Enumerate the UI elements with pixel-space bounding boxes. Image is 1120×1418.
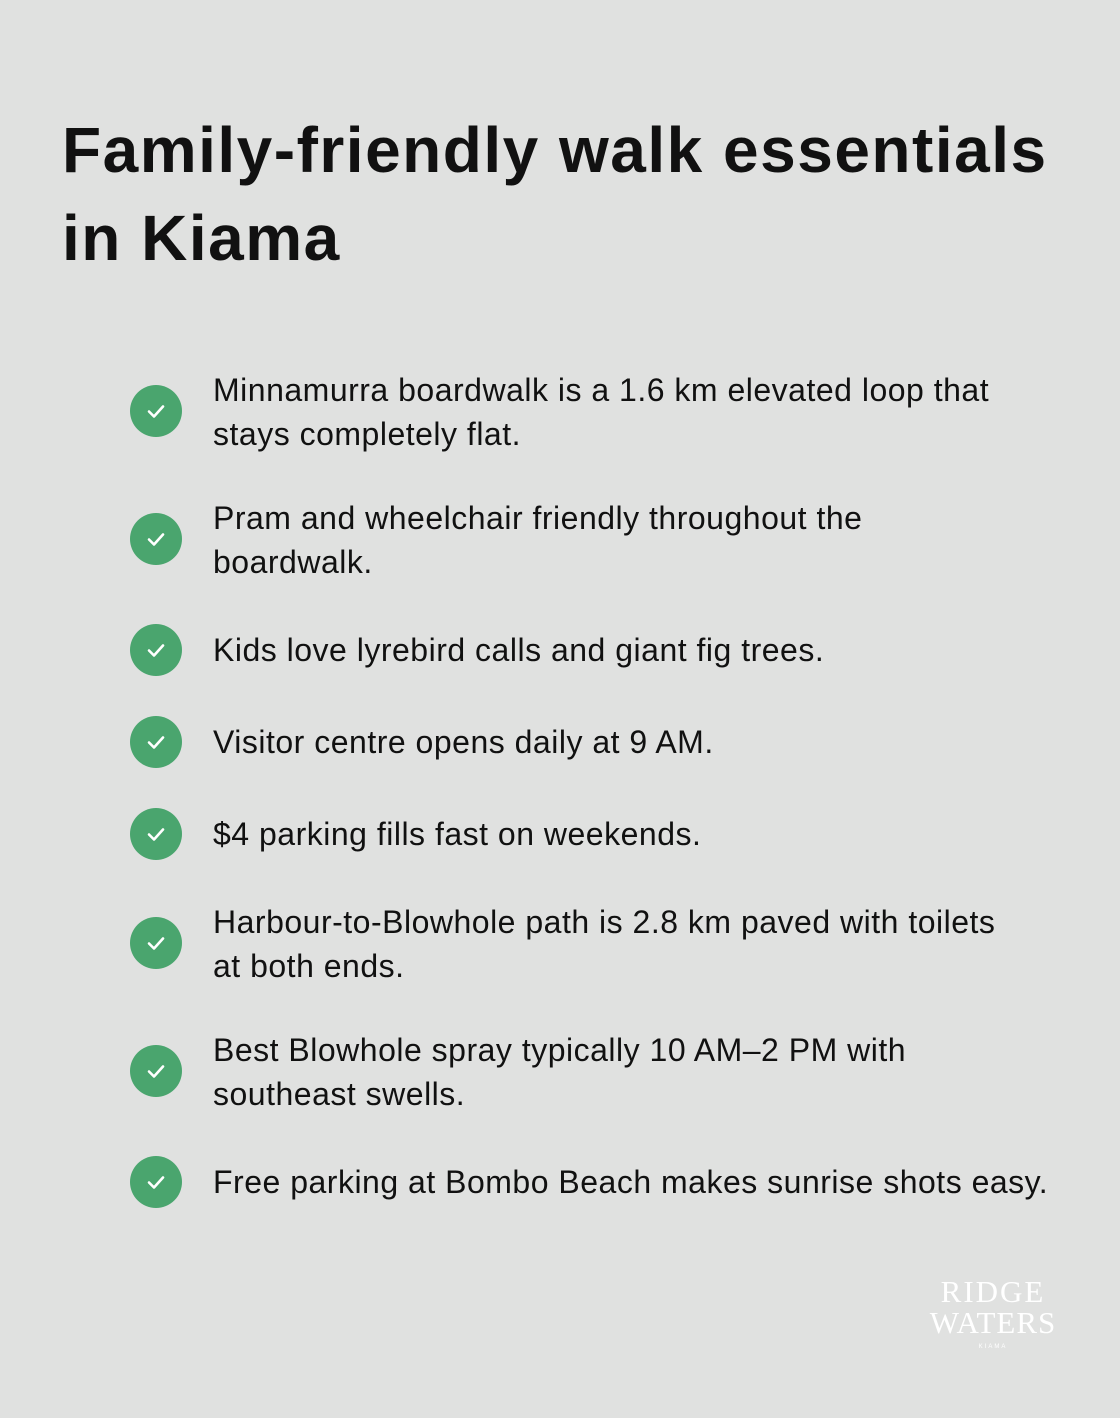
item 6 (130, 904, 995, 984)
text: stays completely flat. (213, 416, 521, 452)
text: Best Blowhole spray typically 10 AM–2 PM with (213, 1032, 906, 1068)
text: Pram and wheelchair friendly throughout the (213, 500, 862, 536)
logo: RIDGE (941, 1274, 1045, 1309)
text (213, 1032, 906, 1112)
item 3 (130, 624, 824, 676)
text: Harbour-to-Blowhole path is 2.8 km paved with toilets (213, 904, 995, 940)
item 2 (130, 500, 862, 580)
title: in Kiama (62, 202, 341, 274)
logo (930, 1274, 1056, 1350)
item 5 (130, 808, 701, 860)
icon: check (130, 808, 182, 860)
icon: check (130, 1045, 182, 1097)
text: southeast swells. (213, 1076, 465, 1112)
item 7 (130, 1032, 906, 1112)
text: Free parking at Bombo Beach makes sunrise shots easy. (213, 1164, 1048, 1200)
icon: check (130, 385, 182, 437)
icon: check (130, 624, 182, 676)
text (213, 372, 989, 452)
text (213, 904, 995, 984)
title: Family-friendly walk essentials (62, 114, 1048, 186)
text (213, 500, 862, 580)
text: boardwalk. (213, 544, 373, 580)
icon: check (130, 1156, 182, 1208)
item 4 (130, 716, 714, 768)
text: Visitor centre opens daily at 9 AM. (213, 724, 714, 760)
item 1 (130, 372, 989, 452)
title (62, 114, 1048, 274)
icon: check (130, 716, 182, 768)
icon: check (130, 513, 182, 565)
item 8 (130, 1156, 1048, 1208)
logo: KIAMA (979, 1344, 1007, 1350)
text: $4 parking fills fast on weekends. (213, 816, 701, 852)
text: Kids love lyrebird calls and giant fig trees. (213, 632, 824, 668)
logo: WATERS (930, 1305, 1056, 1340)
icon: check (130, 917, 182, 969)
text: Minnamurra boardwalk is a 1.6 km elevated loop that (213, 372, 989, 408)
text: at both ends. (213, 948, 405, 984)
